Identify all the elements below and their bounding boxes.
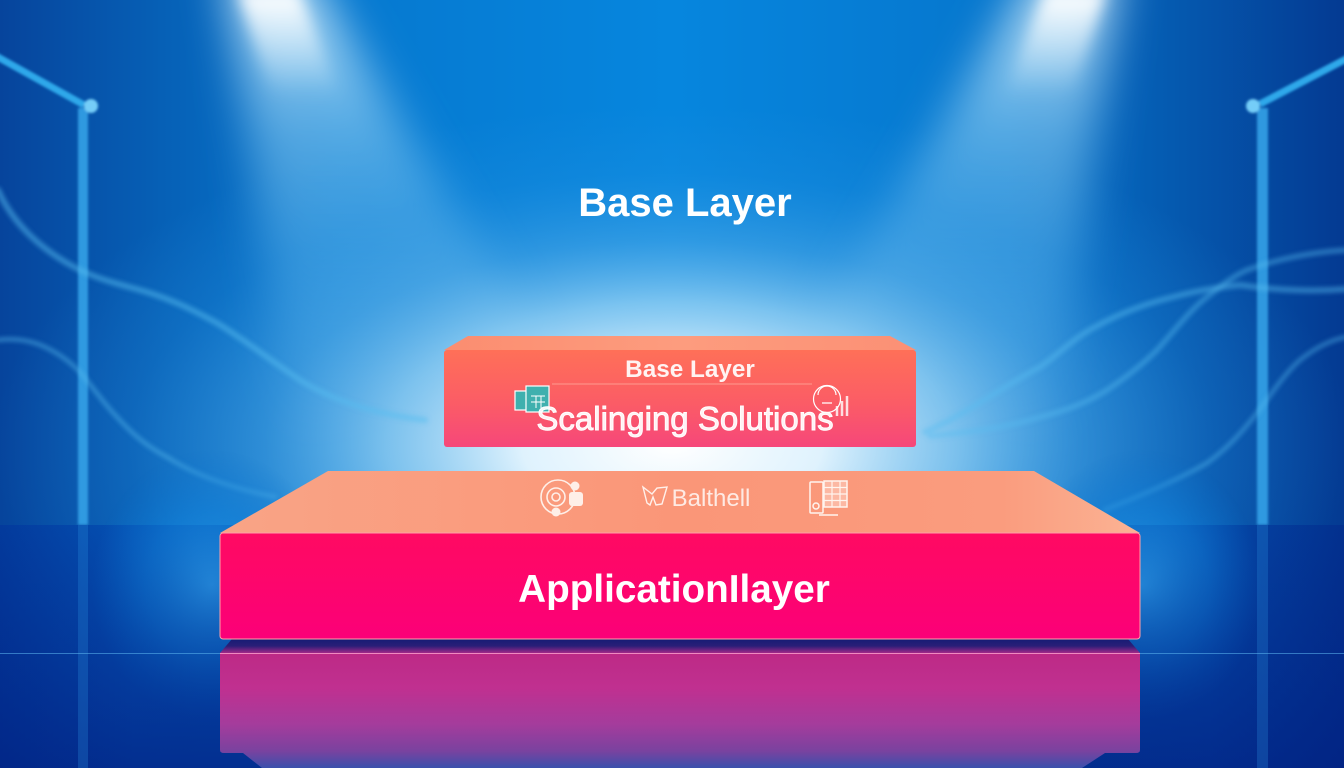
- background waves: [0, 190, 1344, 510]
- top face: [220, 471, 1140, 533]
- top face: [444, 336, 916, 350]
- floor: [0, 525, 1344, 768]
- block title: Scalinging Solutions: [536, 400, 834, 437]
- background wall: [0, 0, 1344, 526]
- spotlight beams: [225, 0, 1119, 440]
- icon: user and circle: [541, 480, 583, 516]
- block heading: Base Layer: [625, 356, 755, 383]
- right light pole: [1246, 58, 1344, 525]
- scaling solutions block: [444, 336, 916, 447]
- title: Base Layer: [578, 181, 792, 225]
- application layer block: [220, 471, 1140, 639]
- front face: [220, 533, 1140, 639]
- left light pole: [0, 56, 98, 525]
- reflection of application layer: [220, 639, 1140, 768]
- icon: globe and bars: [814, 386, 847, 416]
- icon: screens: [515, 386, 549, 412]
- icon: document panel: [810, 481, 847, 515]
- front face: [444, 350, 916, 447]
- icon: logo mark: [643, 487, 667, 505]
- application layer label: ApplicationIlayer: [518, 568, 830, 611]
- logo text: Balthell: Balthell: [672, 485, 750, 512]
- central glow: [0, 100, 1344, 526]
